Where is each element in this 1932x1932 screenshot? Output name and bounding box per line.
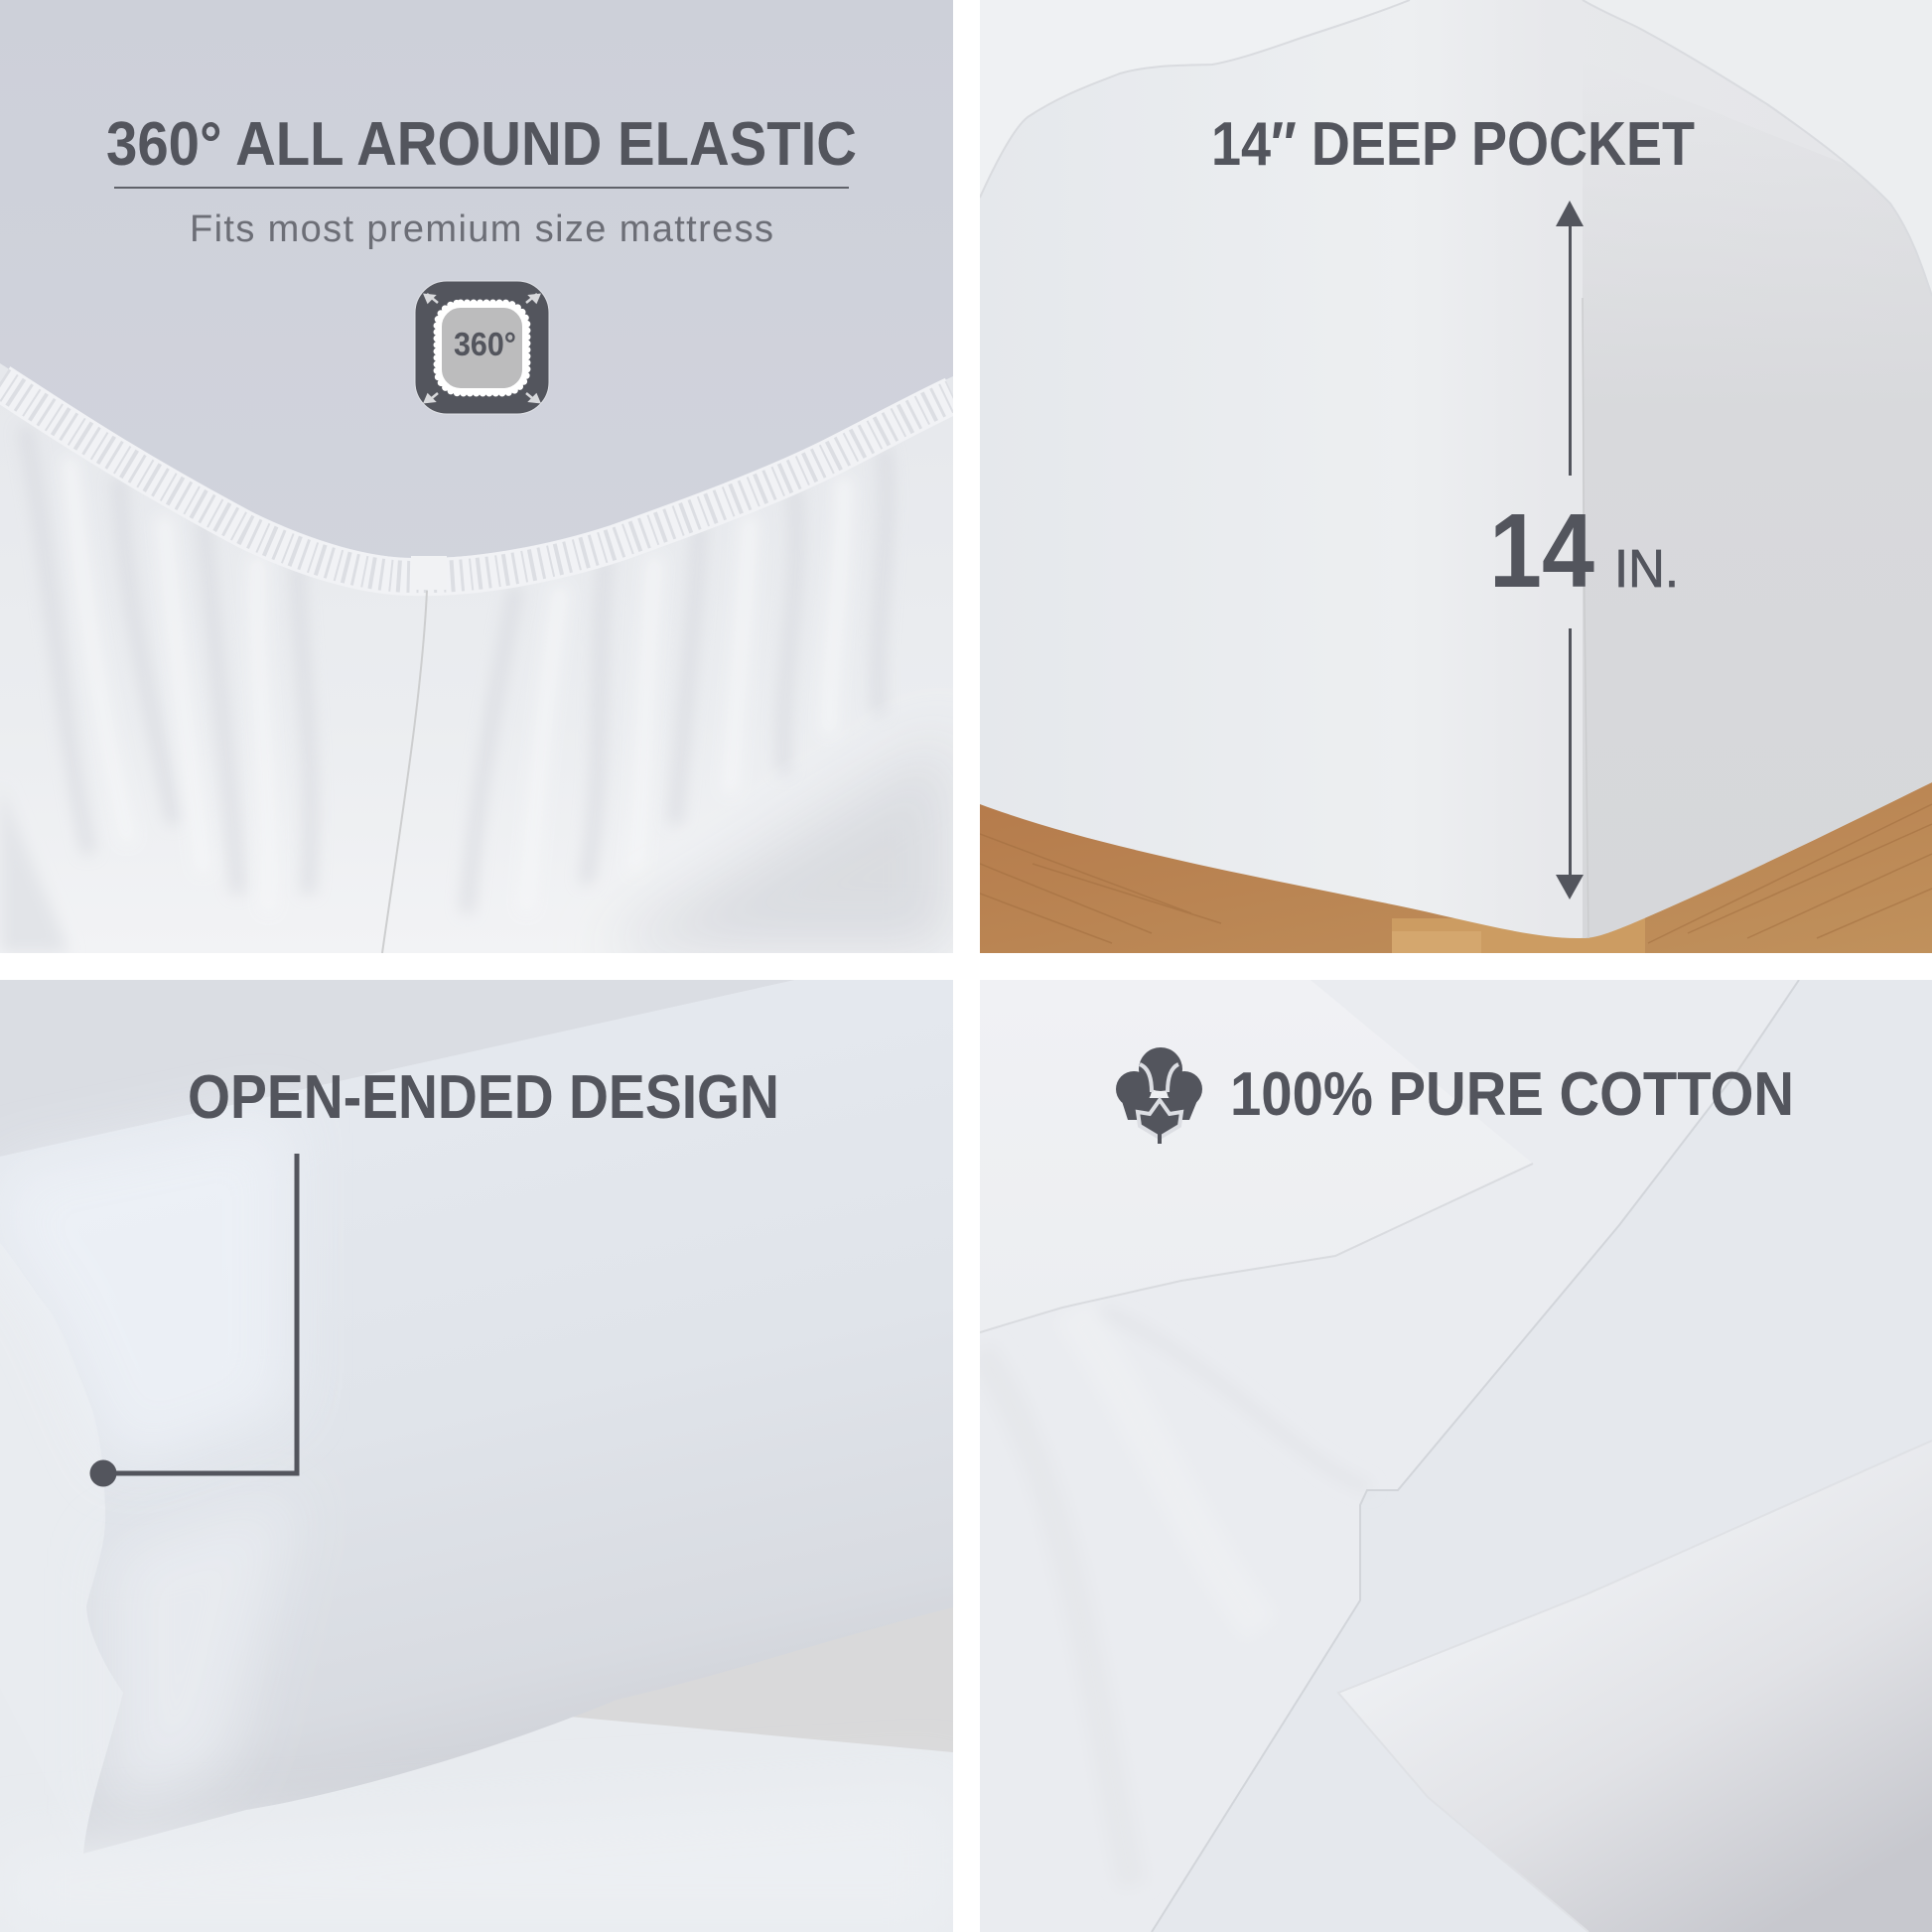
callout: leader line to pillow opening [89,1154,297,1487]
measurement label [1495,514,1675,588]
heading: 360° ALL AROUND ELASTIC [106,110,857,179]
panel: 14 inch deep pocket [980,0,1932,953]
photo: pillow on white sheets [0,980,953,1932]
arrow: height dimension [1556,201,1584,899]
panel: pure cotton [980,980,1932,1932]
heading: 100% PURE COTTON [1230,1060,1794,1129]
photo: flat sheet and pillows [980,980,1932,1932]
measurement label: IN. [1614,539,1679,599]
heading: OPEN-ENDED DESIGN [188,1063,779,1132]
icon: 360 elastic badge [415,281,549,414]
icon: 360 elastic badge: 360° [454,326,516,362]
heading: 14″ DEEP POCKET [1211,110,1695,179]
divider rule [114,187,849,189]
photo: mattress corner on wooden base [980,0,1932,953]
photo: mattress top and elastic fitted sheet [0,0,953,953]
subheading: Fits most premium size mattress [190,208,773,250]
icon: cotton boll [1116,1047,1202,1144]
panel: 360 elastic [0,0,953,953]
panel: open-ended pillowcase [0,980,953,1932]
measurement label: 14 [1489,492,1594,610]
